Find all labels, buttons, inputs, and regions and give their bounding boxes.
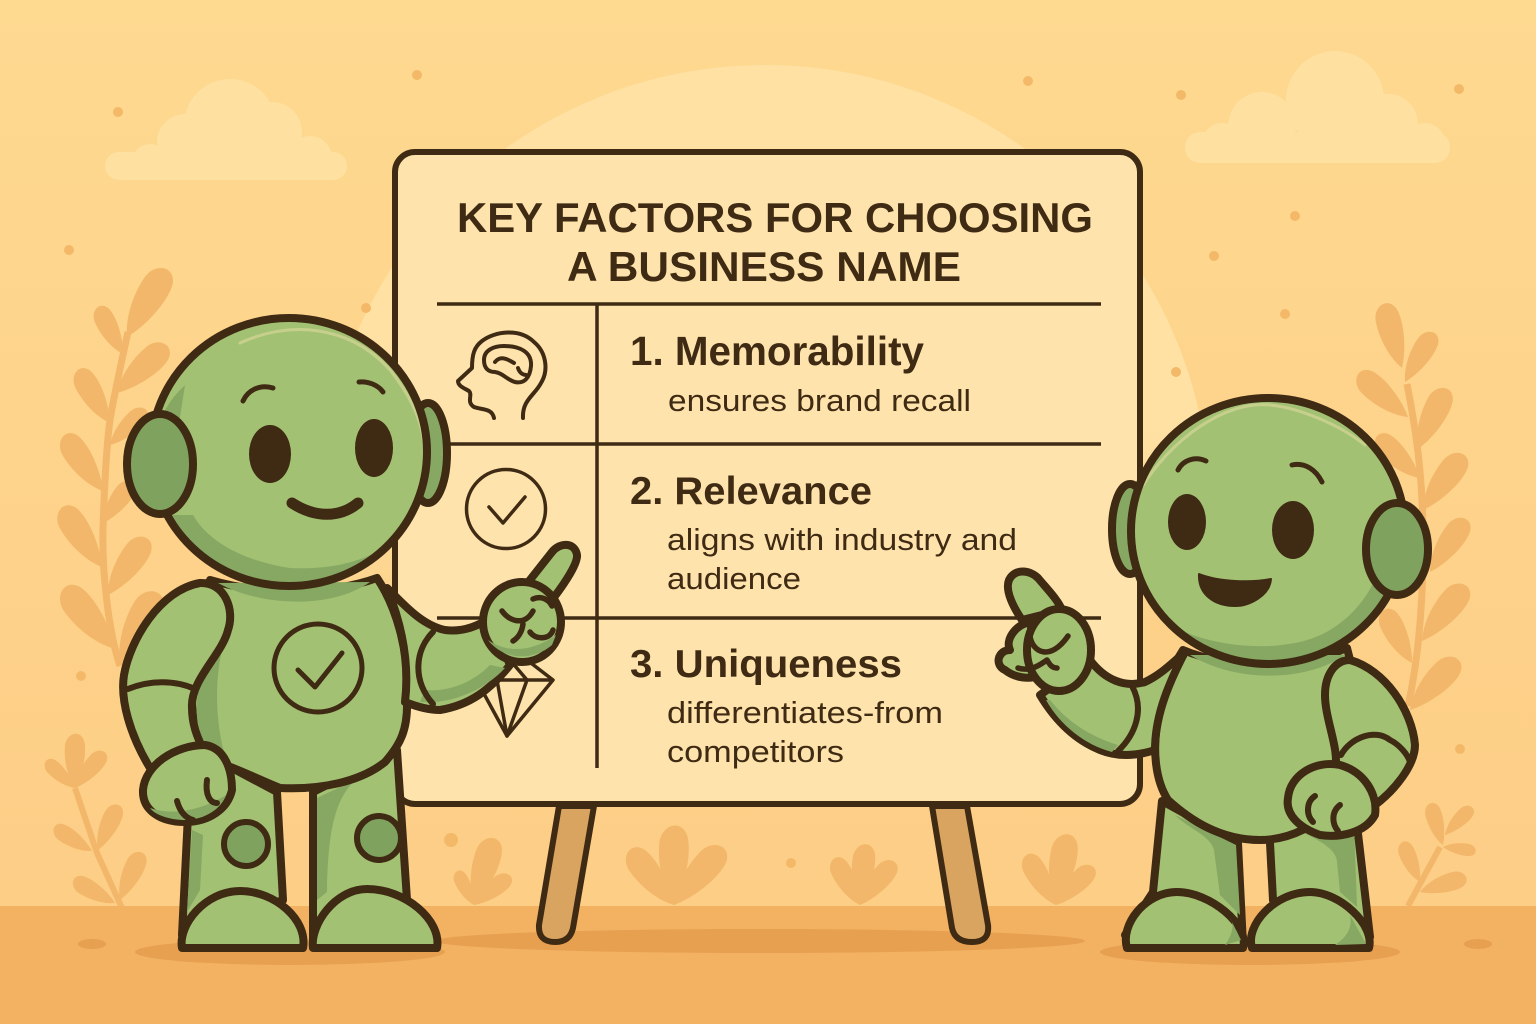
pointing arm [1040, 652, 1185, 755]
side hand [1288, 764, 1375, 836]
factor 1: 1. Memorability [630, 328, 924, 374]
factor 3: 3. Uniqueness [630, 643, 902, 686]
eyes [1168, 494, 1314, 559]
chest badge [274, 624, 362, 712]
plant left lower [41, 734, 150, 911]
plant right [1350, 300, 1476, 719]
right foot [313, 889, 437, 948]
ground shadows [78, 929, 1492, 965]
cloud left [105, 79, 347, 180]
eyebrows [243, 382, 383, 401]
icon: diamond [477, 660, 553, 736]
left foot [182, 891, 304, 948]
right leg [313, 750, 407, 940]
sun [320, 65, 1210, 955]
left leg [1125, 801, 1243, 945]
knee joints [224, 816, 401, 866]
smile [292, 503, 358, 514]
plant left [51, 262, 179, 673]
factor 2 [630, 470, 1017, 557]
far ear [1112, 484, 1148, 574]
right leg [1270, 820, 1370, 937]
icon: check circle [466, 470, 546, 548]
factor 2 description line 2: audience [667, 561, 801, 596]
ground [0, 906, 1536, 1024]
factor 1 [630, 328, 971, 418]
pointing arm [387, 588, 510, 710]
plants under board [450, 826, 1100, 914]
cloud right [1185, 51, 1450, 163]
eyebrows [1178, 459, 1322, 482]
near ear [1366, 503, 1428, 595]
scattered dots [64, 70, 1465, 868]
side hand [143, 745, 232, 822]
factor 2: 2. Relevance [630, 470, 872, 513]
title line 2: A BUSINESS NAME [567, 243, 961, 290]
far ear [409, 403, 447, 503]
head [1131, 398, 1405, 664]
factor 3 description: differentiates-from [667, 695, 943, 730]
smile [1199, 574, 1271, 606]
plant right lower [1395, 801, 1477, 906]
arm at side [1325, 660, 1415, 805]
pointing hand [999, 572, 1091, 691]
board [395, 152, 1140, 804]
robot left [123, 318, 577, 948]
near ear [127, 414, 193, 514]
factor 3 [630, 643, 943, 730]
right foot [1251, 892, 1370, 948]
arm at side [123, 583, 230, 768]
factor 2 description: aligns with industry and [667, 522, 1017, 557]
icon: brain head [458, 332, 545, 418]
table rules [437, 304, 1101, 768]
easel legs [539, 806, 988, 942]
torso [190, 578, 407, 788]
pointing hand [483, 545, 577, 662]
title: KEY FACTORS FOR CHOOSING [457, 194, 1093, 241]
eyes [249, 419, 393, 483]
head [151, 318, 427, 586]
robot right [999, 398, 1428, 948]
left leg [182, 767, 283, 935]
factor 1 description: ensures brand recall [668, 383, 971, 418]
factor 3 description line 2: competitors [667, 734, 844, 769]
left foot [1126, 892, 1244, 948]
torso [1155, 648, 1364, 840]
